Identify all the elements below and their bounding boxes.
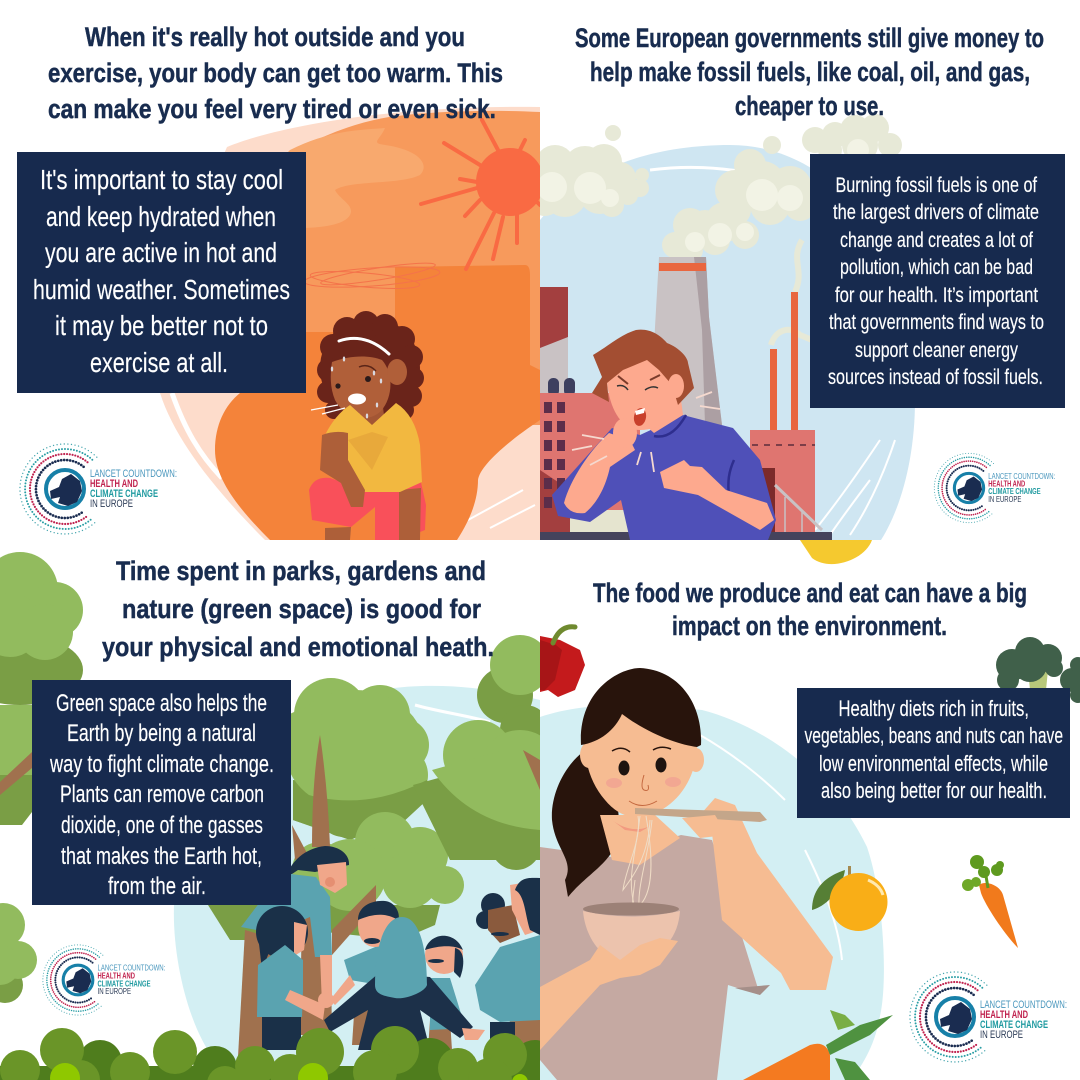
- figure: right girl: [425, 936, 464, 1030]
- logo: Lancet Countdown: HEALTH AND: [988, 478, 1025, 488]
- logo: Lancet Countdown: CLIMATE CHANGE: [97, 978, 151, 988]
- illustration: brick buildings on left: [540, 337, 568, 395]
- logo: Lancet Countdown: [934, 453, 1055, 523]
- callout: green space and climate: Plants can remove carbon: [60, 781, 264, 808]
- illustration: left trees: [0, 552, 83, 1003]
- callout: burning fossil fuels: support cleaner energy: [855, 338, 1018, 362]
- icon: sun: [421, 120, 544, 269]
- heading: heat and exercise: [48, 22, 503, 124]
- callout: green space and climate: [32, 680, 291, 905]
- illustration: woman eating noodles and vegetables: [540, 540, 1080, 1080]
- heading: heat and exercise: exercise, your body can get too warm. This: [48, 58, 503, 88]
- callout: green space and climate: from the air.: [108, 873, 206, 900]
- illustration: tired girl sweating: [309, 311, 426, 540]
- logo: Lancet Countdown: IN EUROPE: [980, 1029, 1023, 1041]
- logo: Lancet Countdown: HEALTH AND: [97, 970, 135, 980]
- illustration: foreground hedge: [0, 1026, 557, 1080]
- illustration: smoke clouds: [518, 114, 902, 263]
- callout: green space and climate: dioxide, one of the gasses: [61, 812, 263, 839]
- heading: heat and exercise: can make you feel very tired or even sick.: [48, 94, 496, 124]
- illustration: coughing boy: [552, 330, 776, 540]
- illustration: group of children: [241, 846, 540, 1050]
- icon: banana: [800, 540, 872, 564]
- panel: food and diet: [540, 540, 1080, 1080]
- illustration: woman eating: [540, 668, 833, 1080]
- logo: Lancet Countdown: HEALTH AND: [90, 478, 138, 490]
- figure: boy: [330, 901, 399, 1005]
- logo: Lancet Countdown: IN EUROPE: [90, 498, 133, 510]
- logo: Lancet Countdown: [910, 972, 1067, 1062]
- panel: exercise in the heat: [17, 22, 544, 540]
- panel: fossil fuels: [518, 23, 1065, 540]
- callout: stay cool and hydrated: [17, 152, 306, 393]
- logo: Lancet Countdown: HEALTH AND: [980, 1009, 1028, 1021]
- heading: green space benefits: nature (green space) is good for: [122, 594, 481, 624]
- logo: Lancet Countdown: LANCET COUNTDOWN:: [97, 963, 165, 973]
- logo: Lancet Countdown: CLIMATE CHANGE: [90, 488, 158, 500]
- illustration: factory, smoke and coughing boy: [518, 114, 915, 540]
- figure: woman leaning in: [241, 846, 349, 1008]
- logo: Lancet Countdown: LANCET COUNTDOWN:: [90, 468, 177, 480]
- callout: green space and climate: Green space also helps the: [56, 690, 267, 717]
- callout: stay cool and hydrated: humid weather. Sometimes: [33, 274, 290, 305]
- callout: healthy diets: [797, 688, 1070, 818]
- figure: two right children: [475, 878, 540, 1050]
- icon: small carrot: [962, 855, 1018, 948]
- figure: girl in hijab: [324, 917, 485, 1050]
- heading: heat and exercise: When it's really hot outside and you: [85, 22, 465, 52]
- heading: food and environment: impact on the environment.: [672, 611, 947, 641]
- logo: Lancet Countdown: IN EUROPE: [97, 986, 131, 996]
- illustration: factory with chimneys: [770, 349, 777, 432]
- illustration: tree trunks: [238, 735, 540, 1057]
- icon: heat haze squiggle: [306, 262, 440, 289]
- heading: food and environment: [593, 578, 1027, 641]
- logo: Lancet Countdown: [43, 945, 165, 1015]
- heading: green space benefits: Time spent in parks, gardens and: [116, 556, 486, 586]
- callout: stay cool and hydrated: and keep hydrated when: [46, 201, 276, 232]
- callout: green space and climate: that makes the Earth hot,: [61, 843, 262, 870]
- callout: burning fossil fuels: [810, 154, 1065, 408]
- illustration: cooling tower: [650, 257, 722, 425]
- logo: Lancet Countdown: CLIMATE CHANGE: [980, 1019, 1048, 1031]
- figure: left child: [256, 906, 325, 1050]
- illustration: trees, children and hedge: [0, 552, 560, 1080]
- illustration: hot orange background with sun: [160, 107, 544, 540]
- heading: green space benefits: your physical and emotional heath.: [102, 632, 494, 662]
- logo: Lancet Countdown: IN EUROPE: [988, 494, 1022, 504]
- icon: large carrot: [743, 1010, 893, 1080]
- callout: green space and climate: way to fight climate change.: [49, 751, 274, 778]
- callout: stay cool and hydrated: you are active in hot and: [45, 237, 277, 268]
- icon: broccoli: [996, 637, 1080, 703]
- heading: fossil fuel subsidies: cheaper to use.: [735, 91, 884, 121]
- logo: Lancet Countdown: [20, 444, 177, 534]
- panel: green space: [0, 552, 560, 1080]
- callout: stay cool and hydrated: exercise at all.: [90, 347, 228, 378]
- illustration: central tree: [208, 678, 464, 940]
- logo: Lancet Countdown: CLIMATE CHANGE: [988, 486, 1041, 496]
- callout: stay cool and hydrated: it may be better not to: [55, 310, 268, 341]
- heading: fossil fuel subsidies: [575, 23, 1044, 121]
- heading: green space benefits: [102, 556, 494, 662]
- callout: green space and climate: Earth by being a natural: [67, 720, 256, 747]
- icon: orange: [812, 866, 888, 931]
- callout: stay cool and hydrated: It's important to stay cool: [40, 164, 283, 195]
- illustration: right tree: [413, 635, 540, 870]
- icon: red pepper: [540, 627, 585, 697]
